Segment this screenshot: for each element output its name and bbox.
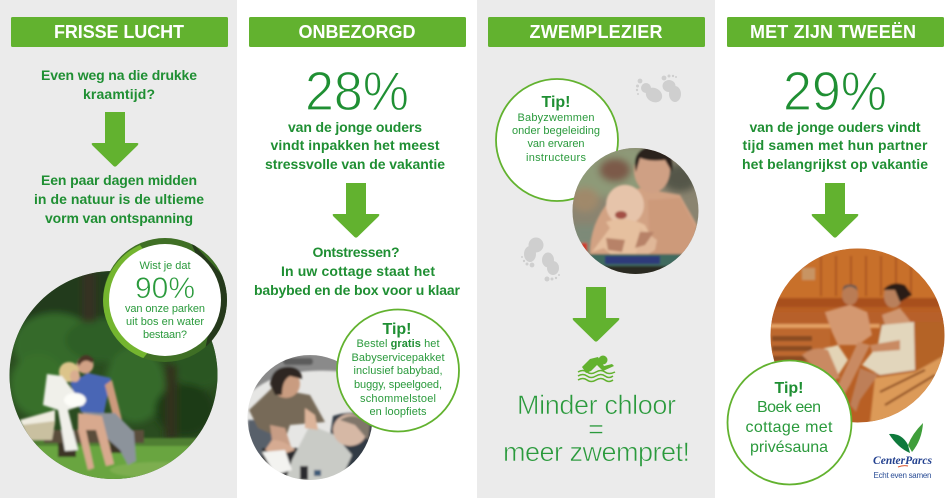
logo: center parcs: CenterParcs [873, 455, 933, 467]
statistic description: het belangrijkst op vakantie [742, 156, 928, 172]
callout: tip: Tip! [542, 94, 570, 111]
statistic: 29 percent: 29% [783, 62, 887, 122]
panel: onbezorgd [247, 17, 466, 482]
callout: tip: onder begeleiding [512, 125, 600, 137]
callout: 90 percent: bestaan? [143, 329, 187, 341]
nature text: Een paar dagen midden [41, 172, 197, 188]
heading: onbezorgd: ONBEZORGD [298, 22, 416, 42]
intro question: Even weg na die drukke [41, 67, 197, 83]
baby [606, 185, 644, 225]
callout: tip: cottage met [746, 419, 833, 436]
callout: tip [337, 310, 459, 432]
baby bath [22, 420, 56, 442]
icon: footprints bottom [521, 238, 560, 282]
heading: onbezorgd [249, 17, 466, 47]
callout: tip: Babyservicepakket [352, 352, 444, 364]
intro question [41, 67, 197, 102]
callout: 90 percent: 90% [135, 272, 195, 305]
callout: tip [496, 79, 618, 201]
destress text: Ontstressen? [312, 244, 400, 260]
logo: center parcs [873, 423, 933, 480]
heading: zwemplezier [488, 17, 705, 47]
intro question: kraamtijd? [83, 86, 155, 102]
slogan: Minder chloor [517, 390, 676, 420]
man [842, 285, 858, 305]
nature text: vorm van ontspanning [45, 210, 193, 226]
callout: tip: van ervaren [528, 138, 584, 150]
statistic description: van de jonge ouders [288, 119, 422, 135]
nature text: in de natuur is de ultieme [34, 191, 204, 207]
callout: 90 percent: van onze parken [125, 303, 205, 315]
woman [884, 284, 902, 308]
photo: father and baby in the pool [571, 146, 700, 276]
baby [285, 425, 352, 482]
heading: met zijn tweeen [727, 17, 944, 47]
callout: 90 percent: uit bos en water [126, 316, 204, 328]
statistic description: van de jonge ouders vindt [750, 119, 921, 135]
photo: father and child in car seat [247, 354, 373, 482]
callout: tip [728, 360, 852, 484]
heading: met zijn tweeen: MET ZIJN TWEEËN [750, 22, 916, 42]
callout: tip: Tip! [774, 380, 804, 397]
callout: tip: schommelstoel [360, 393, 436, 405]
water [589, 252, 682, 267]
panel: frisse lucht [9, 17, 228, 484]
destress text: In uw cottage staat het [281, 263, 435, 279]
man [76, 356, 94, 374]
callout: tip: inclusief babybad, [354, 365, 442, 377]
icon: swimmer [578, 356, 615, 382]
heading: frisse lucht: FRISSE LUCHT [54, 22, 184, 42]
callout: tip: instructeurs [526, 152, 586, 164]
callout: tip: Babyzwemmen [518, 112, 594, 124]
panel: met zijn tweeen [727, 17, 945, 484]
callout: 90 percent [103, 238, 227, 362]
statistic description [265, 119, 445, 172]
destress text: babybed en de box voor u klaar [254, 282, 461, 298]
statistic: 28 percent: 28% [305, 62, 409, 122]
statistic description [742, 119, 928, 172]
callout: tip: buggy, speelgoed, [354, 379, 442, 391]
icon: footprints top [636, 74, 681, 105]
statistic description: vindt inpakken het meest [270, 137, 440, 153]
slogan [503, 390, 690, 467]
statistic description: stressvolle van de vakantie [265, 156, 445, 172]
father [249, 388, 325, 440]
arrow [333, 183, 379, 238]
arrow [573, 287, 619, 342]
callout: tip: Tip! [382, 321, 412, 338]
callout: 90 percent: Wist je dat [140, 260, 190, 272]
logo: center parcs: Echt even samen [874, 471, 932, 480]
callout: tip: Boek een [757, 399, 821, 416]
photo: couple in the sauna [770, 248, 945, 423]
arrow [92, 112, 138, 167]
panel: zwemplezier [488, 17, 705, 467]
slogan: = [588, 414, 604, 444]
statistic description: tijd samen met hun partner [742, 137, 928, 153]
photo: family on a bench in the forest [9, 270, 228, 484]
woman [59, 362, 79, 382]
callout: tip: Bestel gratis het [356, 338, 440, 350]
father [590, 188, 697, 262]
heading: zwemplezier: ZWEMPLEZIER [530, 22, 662, 42]
nature text [34, 172, 204, 226]
arrow [812, 183, 858, 238]
slogan: meer zwempret! [503, 437, 690, 467]
bench [44, 430, 144, 443]
destress text [254, 244, 461, 298]
callout: tip: en loopfiets [370, 406, 427, 418]
callout: tip: privésauna [750, 439, 828, 456]
heading: frisse lucht [11, 17, 228, 47]
